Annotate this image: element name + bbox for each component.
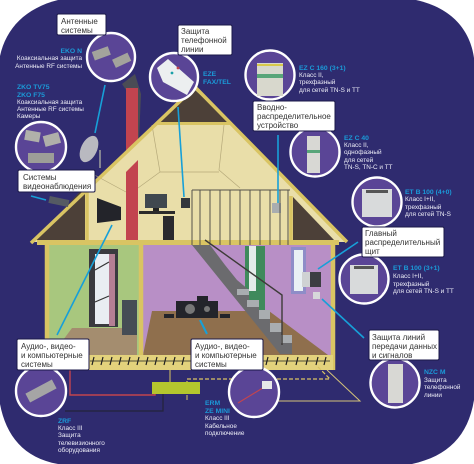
stove [122,300,137,335]
text: EZ C 160: трехфазный [299,78,336,86]
label: Аудио right: и компьютерные [195,351,257,360]
attic wall posts [87,182,291,240]
label: Защита телефонной линии: телефонной [181,36,227,45]
text: ZRF [58,418,105,454]
label: Аудио right: системы [195,360,227,369]
label: Главный распределительный щит: щит [365,247,380,256]
chimney [122,74,141,152]
text: ZRF: оборудования [58,446,100,454]
satellite dish [76,133,102,168]
label: Главный распределительный щит: Главный [365,229,397,238]
text: ET B 100 (4+0): Класс I+II, [405,196,435,203]
label: Аудио left: Аудио-, видео- [21,342,76,351]
text: NZC M: NZC M [424,369,446,376]
text: ZKO: ZKO F75 [17,92,45,99]
house illustration [31,74,347,370]
text: NZC M: линии [424,392,442,399]
circle: ERM ZE MINI [229,367,279,417]
text: ET B 100 (3+1): Класс I+II, [393,273,423,280]
TV wall [97,198,121,223]
text: EZ C 40: Класс II, [344,142,369,149]
attic railing [192,190,290,245]
blue connectors [31,85,364,338]
inner chimney [126,160,138,299]
text: EZE FAX/TEL: EZE [203,71,217,78]
label: Антенные системы: Антенные [61,17,98,26]
text: EZ C 40: EZ C 40 [344,135,369,142]
circle: NZC M [370,358,420,408]
text: EZ C 40: для сетей [344,156,374,164]
text: ERM ZE MINI: Класс III [205,415,230,422]
circle: EZ C 40 [290,128,340,176]
heating cable [90,360,330,362]
text: EKO N: Коаксиальная защита [17,55,82,62]
text: NZC M: Защита [424,377,447,384]
text: ERM ZE MINI [205,400,245,437]
camera [48,196,69,207]
text: ET B 100 (3+1): ET B 100 (3+1) [393,265,440,272]
text: EZE FAX/TEL: FAX/TEL [203,79,231,86]
computer monitor [139,194,175,240]
label: Антенные системы [57,14,106,35]
dark eave right [293,197,334,240]
switchboard [302,272,321,299]
text: NZC M: телефонной [424,383,461,391]
label: Системы видеонаблюдения [18,170,95,192]
text: ZKO [17,84,84,120]
right room floor [143,311,328,355]
text: ZKO: Коаксиальная защита [17,99,83,106]
label: Вводно-распределительное устройство: Вводно- [257,103,287,112]
text: ET B 100 (4+0) [405,189,452,218]
circle: ZRF [16,366,66,416]
text: EKO N [15,48,82,70]
text: EZ C 40 [344,135,393,171]
attic room [32,87,347,242]
text: ERM ZE MINI: ZE MINI [205,408,230,415]
label: Вводно-распределительное устройство: устройство [257,121,299,130]
text: EKO N: EKO N [60,48,82,55]
circle: EZ C 160 [246,50,294,100]
circle: EKO N [87,33,135,81]
green door [245,246,265,310]
text: ET B 100 (4+0): ET B 100 (4+0) [405,189,452,196]
window right [291,247,306,294]
blue connector audio right [200,320,207,334]
text: EKO N: Антенные RF системы [15,63,82,70]
text: EZ C 160: для сетей TN-S и TT [299,86,360,94]
label: Защита линий передачи данных и сигналов: передачи данных [372,342,437,351]
junction box [152,382,200,394]
attic perspective lines [89,125,240,192]
text: ZKO: Камеры [17,113,41,120]
label: Главный распределительный щит [362,227,444,257]
label: Защита линий передачи данных и сигналов: и сигналов [372,351,412,360]
right room wall [140,245,331,360]
label: Вводно-распределительное устройство [253,101,335,131]
distribution box attic [272,203,281,213]
label: Аудио right [191,339,263,370]
left room floor [52,328,137,355]
text: ET B 100 (4+0): для сетей TN-S [405,210,451,218]
label: Вводно-распределительное устройство: распределительное [257,112,331,121]
text: ET B 100 (4+0): трехфазный [405,203,442,211]
label: Антенные системы: системы [61,26,93,35]
label: Аудио right: Аудио-, видео- [195,342,250,351]
text: ERM ZE MINI: подключение [205,430,245,437]
label: Системы видеонаблюдения: Системы [23,173,57,182]
text: ET B 100 (3+1): трехфазный [393,280,430,288]
text: ZKO: ZKO TV75 [17,84,50,91]
label: Аудио left [17,339,89,370]
dark eave left [36,186,85,240]
staircase [192,245,292,354]
circle: EZE FAX/TEL [150,53,198,101]
floor beam [37,240,339,245]
text: ZKO: Антенные RF системы [17,106,84,113]
text: ET B 100 (3+1): для сетей TN-S и TT [393,287,454,295]
label: Защита телефонной линии [178,25,232,55]
circle: ET B 100 (3+1) [340,254,388,304]
label: Защита линий передачи данных и сигналов: Защита линий [372,333,425,342]
text: EZ C 40: однофазный [344,148,382,156]
left room wall [45,245,140,360]
circle: ET B 100 (4+0) [352,178,402,226]
text: EZ C 160: Класс II, [299,72,324,79]
text: EZE FAX/TEL [203,71,231,86]
text: ZRF: телевизионного [58,440,105,447]
label: Защита телефонной линии: Защита [181,27,210,36]
grounding wires and junction [65,366,360,411]
house frame [47,245,333,370]
ceiling beam [155,122,232,125]
text: ZRF: Защита [58,432,81,439]
text: ERM ZE MINI: Кабельное [205,422,237,430]
text: ET B 100 (3+1) [393,265,454,295]
label: Аудио left: и компьютерные [21,351,83,360]
label: Защита линий передачи данных и сигналов [369,330,439,360]
door left [89,249,118,327]
label: Системы видеонаблюдения: видеонаблюдения [23,182,91,191]
text: EZ C 160 [299,65,360,94]
text: ZRF: Класс III [58,425,83,432]
label: Главный распределительный щит: распределительный [365,238,440,247]
stair handrail [205,240,282,345]
circle: ZKO [16,122,66,172]
phone [181,198,190,208]
roof line [31,87,347,243]
foundation strip [45,355,333,370]
text: EZ C 160: EZ C 160 (3+1) [299,65,346,72]
attic dark gable [158,90,231,123]
label: Защита телефонной линии: линии [181,45,204,54]
audio system [164,296,230,318]
label: Аудио left: системы [21,360,53,369]
text: EZ C 40: TN-S, TN-C и TT [344,164,393,171]
text: ERM ZE MINI: ERM [205,400,220,407]
stair treads [237,289,292,343]
text: ZRF: ZRF [58,418,71,425]
text: NZC M [424,369,461,399]
